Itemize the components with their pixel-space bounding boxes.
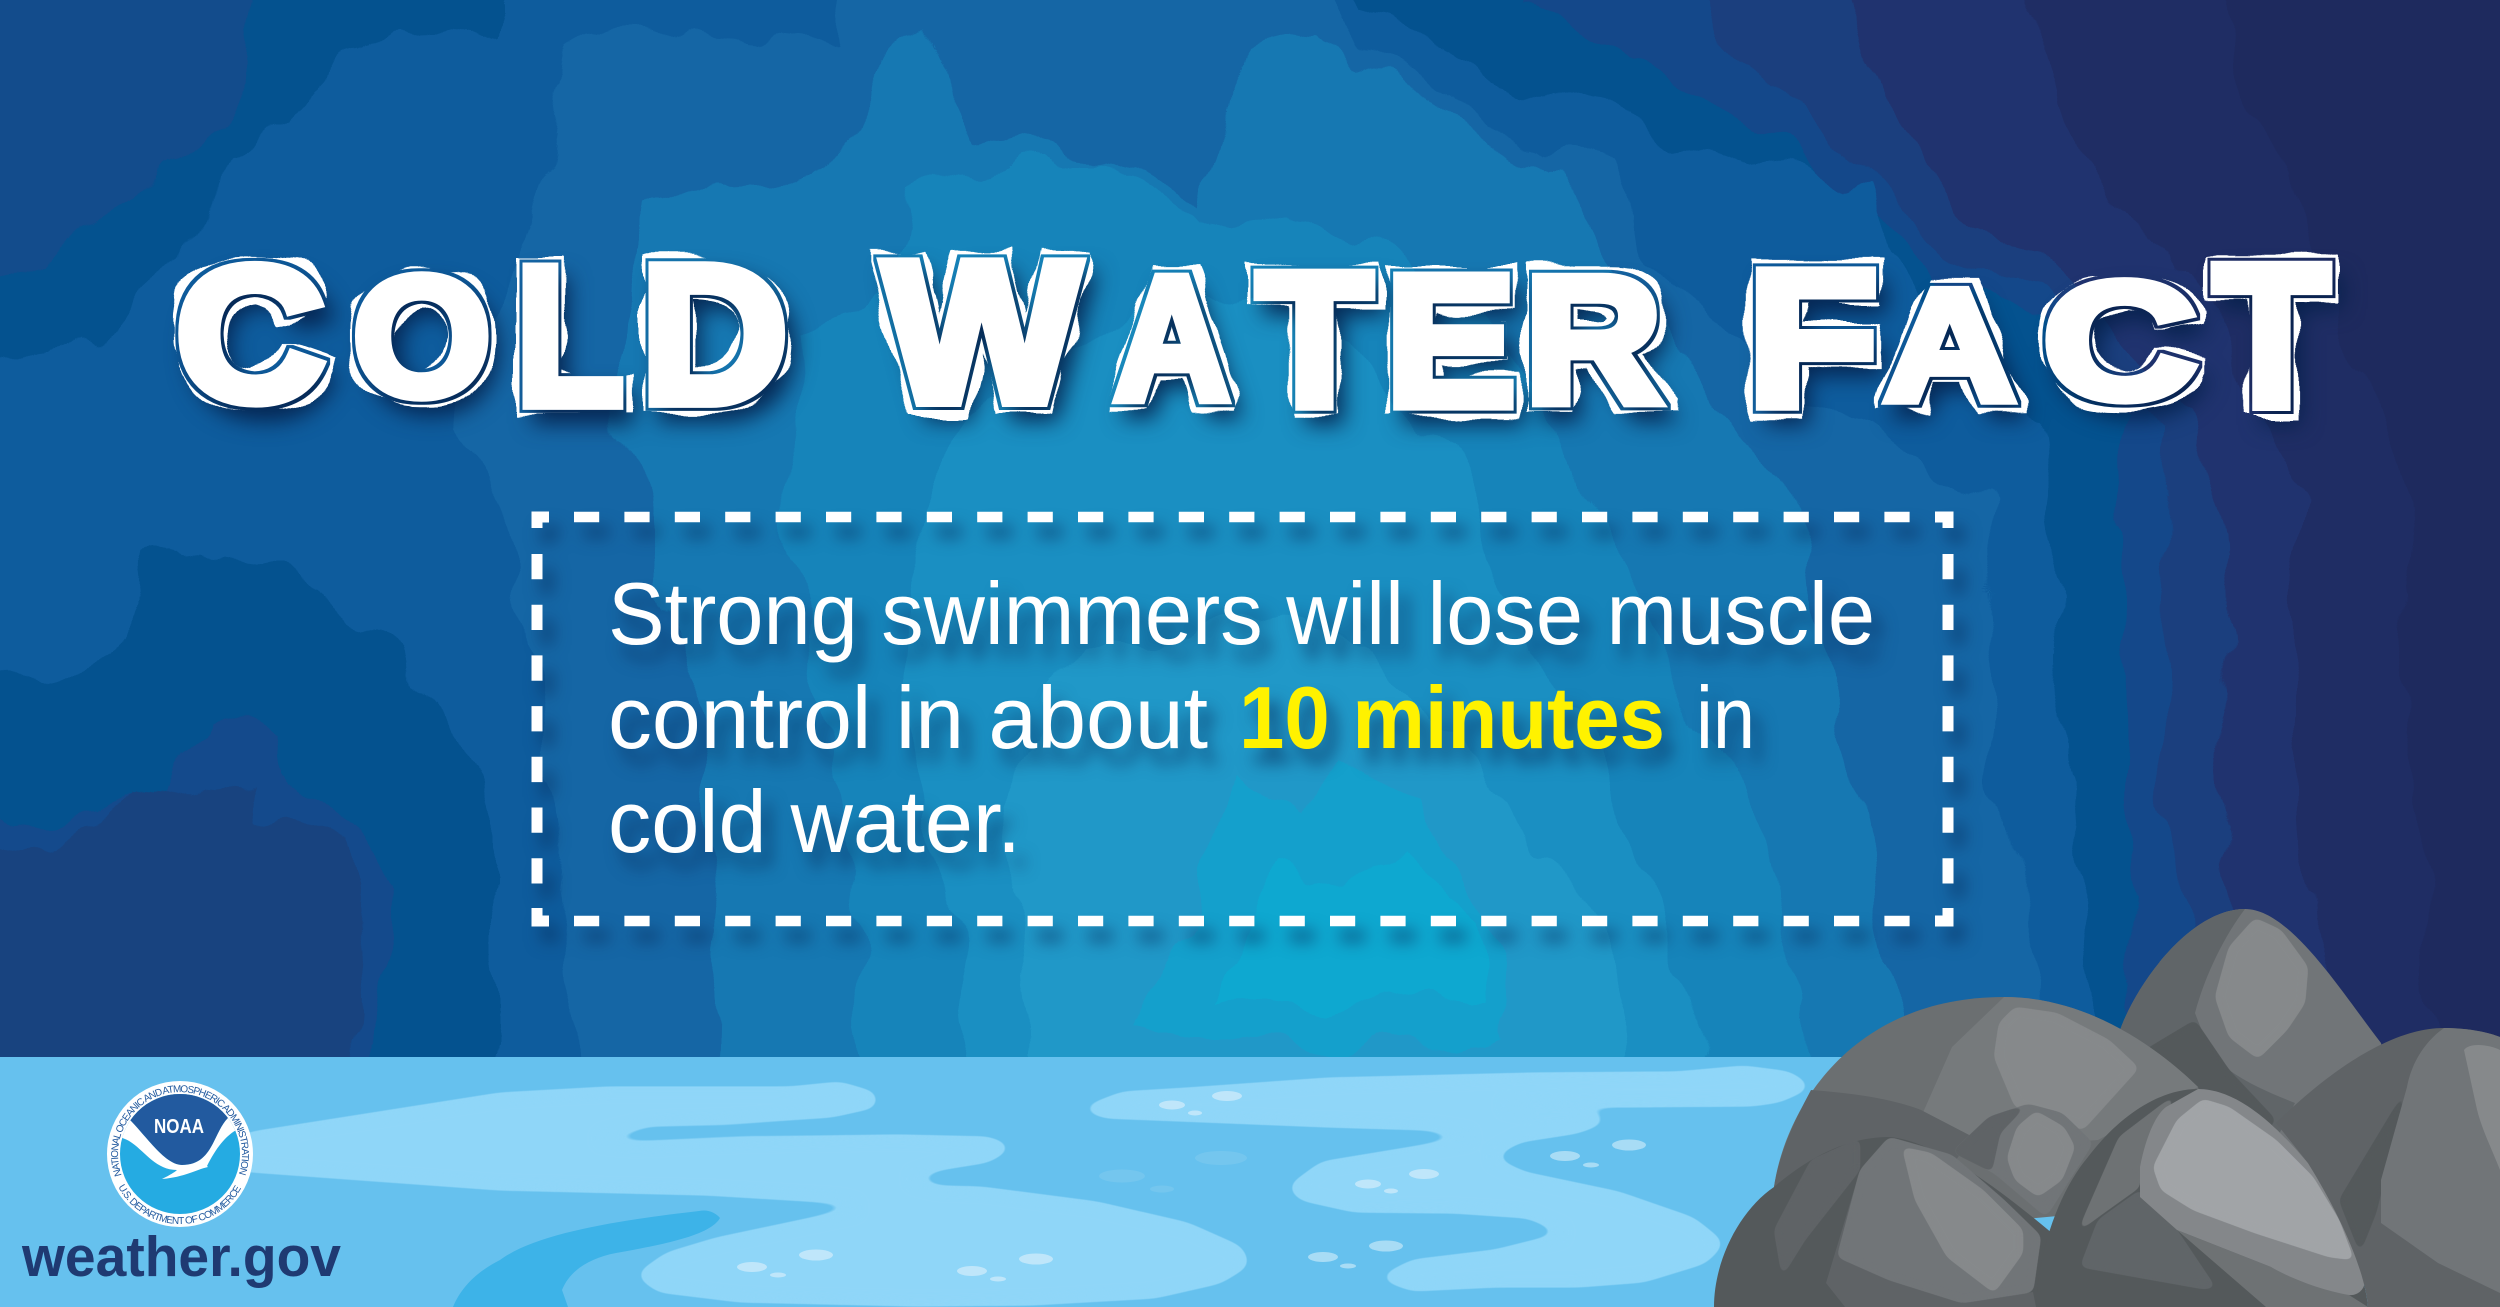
fact line 1: Strong swimmers will lose muscle: [608, 564, 1875, 663]
title: Cold Water Fact: D: [641, 225, 788, 444]
title: Cold Water Fact: L: [516, 226, 624, 446]
callout: dashed fact box: [537, 517, 1948, 921]
title: Cold Water Fact: C: [2043, 248, 2197, 434]
fact line 3: cold water.: [608, 772, 1021, 871]
title: Cold Water Fact: W: [884, 221, 1079, 444]
light water patch right: [1078, 1066, 1813, 1291]
fact line 2: [608, 668, 1755, 767]
bubbles: [737, 1091, 1646, 1282]
title: Cold Water Fact: T: [1257, 234, 1372, 446]
logo wordmark: NOAA: [154, 1116, 204, 1138]
rock: front left: [1714, 1137, 2060, 1307]
light water patch left: [200, 1082, 1250, 1306]
title: Cold Water Fact: A: [1114, 240, 1230, 437]
title: Cold Water Fact: [176, 221, 2329, 448]
logo ring text bottom: U.S. DEPARTMENT OF COMMERCE: [119, 1184, 241, 1224]
fact line 2: control in about: [608, 668, 1208, 767]
rocks: [1714, 909, 2500, 1307]
title: Cold Water Fact: T: [2214, 224, 2329, 448]
rock: back top: [2119, 909, 2412, 1180]
dashed border: [537, 517, 1948, 921]
rock: right: [2276, 1028, 2500, 1307]
logo: blue disc with seabird wave: [120, 1094, 240, 1214]
water surface: [0, 1057, 2500, 1307]
title: Cold Water Fact: E: [1386, 238, 1515, 445]
title: Cold Water Fact: O: [353, 241, 491, 431]
dark water patch: [453, 1210, 720, 1307]
logo ring text top: NATIONAL OCEANIC AND ATMOSPHERIC ADMINISTRATION: [111, 1085, 249, 1176]
NOAA logo: [107, 1081, 253, 1227]
title: Cold Water Fact: F: [1748, 230, 1878, 446]
background: deep water contours: [0, 0, 2328, 1057]
title: Cold Water Fact: R: [1525, 240, 1661, 441]
rock: front center: [2036, 1089, 2368, 1307]
rock: small middle: [1952, 1104, 2093, 1217]
rock: main large: [1774, 997, 2230, 1240]
title: Cold Water Fact: A: [1884, 257, 2015, 434]
highlight: 10 minutes: 10 minutes: [1239, 668, 1665, 767]
fact line 2: in: [1696, 668, 1755, 767]
site label: weather.gov: weather.gov: [21, 1225, 341, 1289]
title: Cold Water Fact: C: [176, 228, 325, 441]
